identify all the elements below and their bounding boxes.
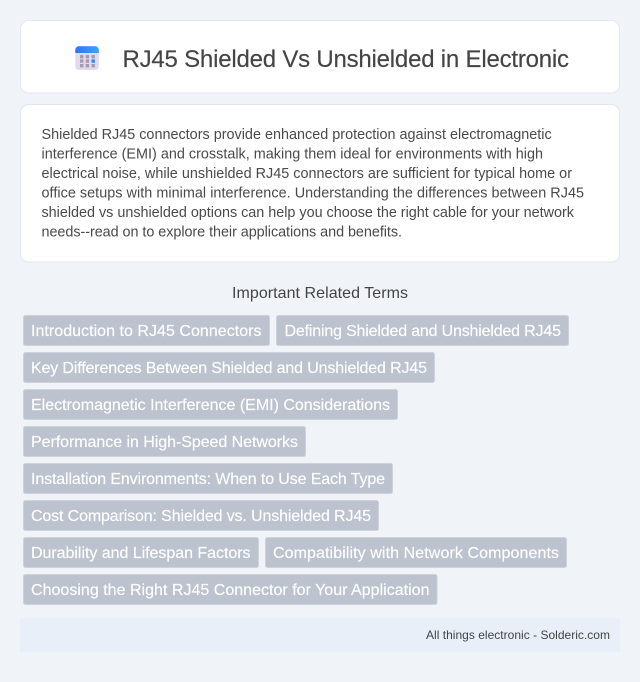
chip: key differences [24,352,434,382]
text block: description: electrical noise, while unshielded RJ45 connectors are sufficient for typical home or [42,166,572,182]
footer: All things electronic - Solderic.com [426,628,610,642]
chip: cost [24,500,378,530]
chip: performance [24,426,306,456]
chip: installation: Installation Environments: When to Use Each Type [31,471,385,488]
text block: description: shielded vs unshielded options can help you choose the right cable for your network [42,205,575,221]
chip: introduction [24,316,270,346]
chip: defining: Defining Shielded and Unshielded RJ45 [284,323,561,340]
chip: choosing: Choosing the Right RJ45 Connector for Your Application [31,582,430,599]
chip: defining [276,316,568,346]
chip: performance: Performance in High-Speed Networks [31,434,298,451]
chip: compatibility: Compatibility with Network Components [273,545,559,562]
text block: description: Shielded RJ45 connectors provide enhanced protection against electromagnetic [42,127,552,143]
chip: key differences: Key Differences Between Shielded and Unshielded RJ45 [31,360,427,377]
text block: description [42,127,584,240]
icon: calendar [75,46,99,70]
panel: header [20,20,620,93]
chip: durability [24,538,258,568]
text block: description: interference (EMI) and crosstalk, making them ideal for environments with high [42,146,543,162]
text block: description: office setups with minimal interference. Understanding the differences between RJ45 [42,186,584,202]
chip: cost: Cost Comparison: Shielded vs. Unshielded RJ45 [31,508,371,525]
chip: introduction: Introduction to RJ45 Connectors [31,323,262,340]
chip: emi: Electromagnetic Interference (EMI) Considerations [31,397,390,414]
chip: compatibility [266,538,566,568]
text block: description: needs--read on to explore their applications and benefits. [42,224,402,240]
chip: choosing [24,574,437,604]
panel: introduction [20,104,620,262]
chip: emi [24,390,398,420]
heading: related terms: Important Related Terms [232,285,408,302]
chip: durability: Durability and Lifespan Factors [31,545,250,562]
footer [20,618,620,652]
panel: term chips [24,316,568,604]
title: RJ45 Shielded Vs Unshielded in Electronic [122,46,569,73]
chip: installation [24,464,392,494]
